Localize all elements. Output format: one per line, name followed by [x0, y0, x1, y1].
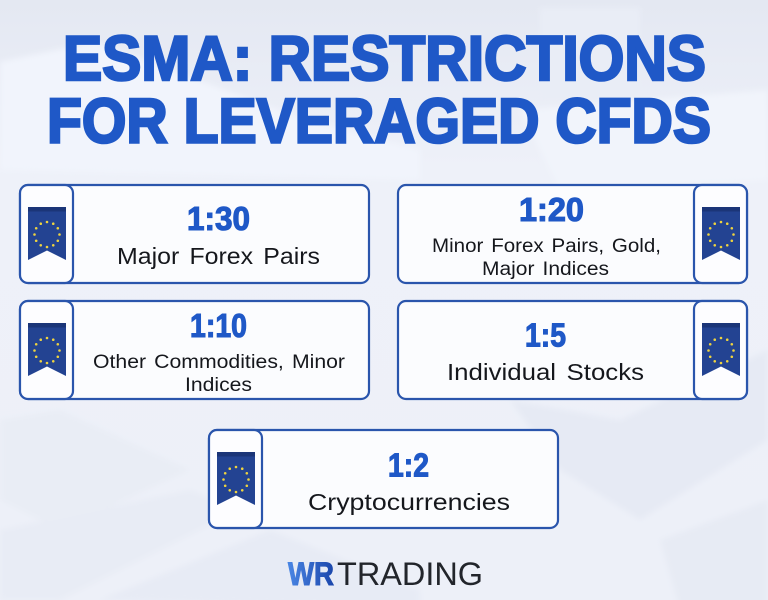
panel: 1:10 other commodities, minor indices: Other Commodities, Minor	[93, 352, 346, 373]
logo: WR Trading: TRADING	[337, 556, 483, 592]
panel: 1:2 cryptocurrencies	[209, 430, 558, 528]
panel: 1:20 minor forex pairs, gold, major indices	[398, 185, 747, 283]
panel: 1:2 cryptocurrencies: Cryptocurrencies	[308, 489, 510, 515]
panel: 1:10 other commodities, minor indices: 1:10	[190, 307, 247, 344]
panel: 1:5 individual stocks: 1:5	[525, 316, 566, 354]
panel: 1:20 minor forex pairs, gold, major indices: Minor Forex Pairs, Gold,	[432, 236, 661, 257]
panel: 1:2 cryptocurrencies: 1:2	[388, 446, 429, 484]
panel: 1:5 individual stocks: Individual Stocks	[447, 359, 644, 385]
panel: 1:10 other commodities, minor indices	[20, 301, 369, 399]
panel: 1:20 minor forex pairs, gold, major indices: Major Indices	[482, 259, 609, 280]
panel: 1:30 major forex pairs: 1:30	[187, 200, 250, 237]
panel: 1:10 other commodities, minor indices: Indices	[185, 375, 252, 396]
panel: 1:5 individual stocks	[398, 301, 747, 399]
title: FOR LEVERAGED CFDS	[47, 86, 711, 156]
panel: 1:20 minor forex pairs, gold, major indices: 1:20	[519, 191, 584, 228]
panel: 1:30 major forex pairs: Major Forex Pairs	[117, 243, 320, 269]
title	[47, 24, 711, 156]
title: ESMA: RESTRICTIONS	[63, 24, 706, 94]
logo: WR Trading: WR	[288, 556, 334, 592]
panel: 1:30 major forex pairs	[20, 185, 369, 283]
